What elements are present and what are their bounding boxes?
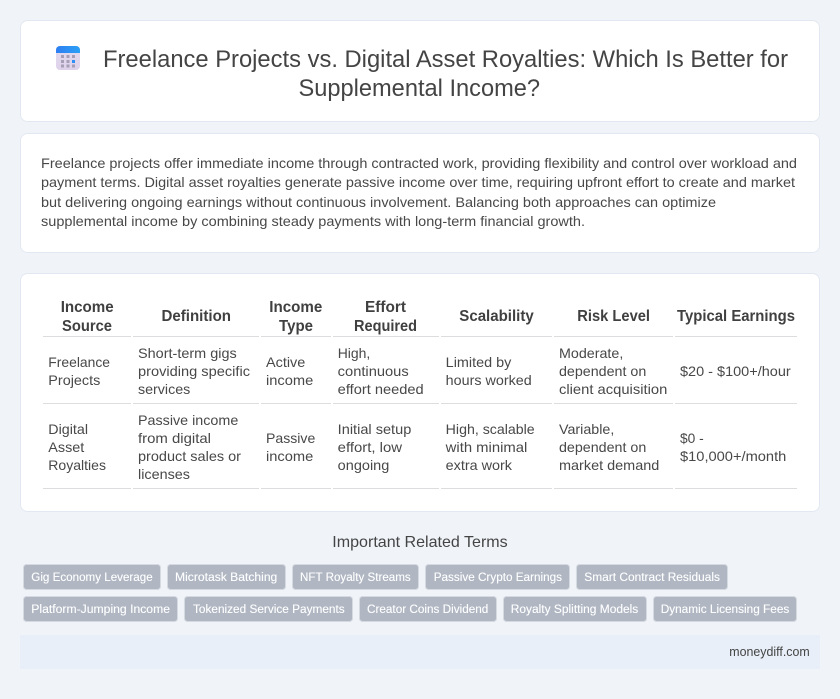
table row: freelance projects: Short-term gigs [138, 345, 237, 361]
title text [103, 46, 788, 102]
table row: digital asset royalties: Initial setup [338, 421, 412, 437]
tags: related terms [24, 564, 796, 622]
heading: important related terms: Important Related Terms [332, 534, 508, 551]
panel: title [20, 20, 820, 122]
tag [184, 596, 352, 622]
table header [61, 299, 795, 335]
tag: Dynamic Licensing Fees [661, 602, 789, 616]
table row: freelance projects: providing specific [138, 363, 250, 379]
tag: NFT Royalty Streams [300, 570, 411, 584]
table row: digital asset royalties: product sales or [138, 448, 241, 464]
table row: freelance projects: client acquisition [559, 381, 667, 397]
table row: freelance projects: Limited by [446, 354, 511, 370]
tag: Smart Contract Residuals [584, 570, 720, 584]
footer bar [20, 635, 820, 669]
table row: digital asset royalties: High, scalable [446, 421, 535, 437]
table row: digital asset royalties: ongoing [338, 457, 389, 473]
table row: freelance projects: effort needed [338, 381, 424, 397]
table header: Scalability [459, 308, 534, 325]
table row: digital asset royalties [48, 412, 786, 482]
table row: freelance projects: Moderate, [559, 345, 623, 361]
table header: Typical Earnings [677, 308, 795, 325]
intro paragraph: but delivering ongoing earnings without continuous involvement. Balancing both approaches can optimize [41, 194, 716, 210]
table header: Income [269, 299, 322, 316]
tag [292, 564, 418, 590]
table row: freelance projects: Projects [48, 372, 100, 388]
tag: Passive Crypto Earnings [434, 570, 562, 584]
table row: digital asset royalties: with minimal [445, 439, 527, 455]
tag [426, 564, 570, 590]
tag: Creator Coins Dividend [367, 602, 488, 616]
tag: Royalty Splitting Models [511, 602, 638, 616]
table row: digital asset royalties: Passive [266, 430, 316, 446]
table row: digital asset royalties: effort, low [338, 439, 403, 455]
table row: digital asset royalties: market demand [559, 457, 659, 473]
table row: freelance projects: $20 - $100+/hour [680, 363, 791, 379]
tag [504, 596, 646, 622]
table row: digital asset royalties: Passive income [138, 412, 239, 428]
tag: Gig Economy Leverage [31, 570, 153, 584]
tag [24, 564, 160, 590]
intro paragraph: Freelance projects offer immediate income through contracted work, providing flexibility and control over workload and [41, 155, 797, 171]
table row: freelance projects: services [138, 381, 190, 397]
table row: digital asset royalties: licenses [138, 466, 190, 482]
table row: digital asset royalties: $10,000+/month [680, 448, 786, 464]
table row: digital asset royalties: dependent on [559, 439, 646, 455]
intro paragraph: payment terms. Digital asset royalties generate passive income over time, requiring upfront effort to create and market [41, 174, 795, 190]
table row: freelance projects: dependent on [559, 363, 646, 379]
table header: Risk Level [577, 308, 650, 325]
intro paragraph: supplemental income by combining steady payments with long-term financial growth. [41, 213, 585, 229]
tag [654, 596, 796, 622]
table row: digital asset royalties: Asset [48, 439, 84, 455]
table row: digital asset royalties: $0 - [680, 430, 704, 446]
icon: calendar [56, 46, 80, 70]
table row: freelance projects: hours worked [446, 372, 532, 388]
tag: Tokenized Service Payments [193, 602, 345, 616]
table header: Definition [162, 308, 231, 325]
table row: freelance projects: High, [338, 345, 370, 361]
table header: Required [354, 318, 417, 335]
table row: digital asset royalties: Digital [48, 421, 88, 437]
table row: freelance projects [48, 345, 791, 397]
tag [360, 596, 496, 622]
table row: digital asset royalties: extra work [446, 457, 513, 473]
tag [576, 564, 728, 590]
table header: Type [279, 318, 313, 335]
panel: introduction [20, 134, 820, 252]
tag: Microtask Batching [175, 570, 277, 584]
table header: Effort [365, 299, 407, 316]
table header: Source [62, 318, 112, 335]
table row: digital asset royalties: Royalties [48, 457, 106, 473]
table row: digital asset royalties: from digital [138, 430, 211, 446]
title text: Supplemental Income? [298, 75, 540, 102]
table row: digital asset royalties: income [266, 448, 314, 464]
table row: freelance projects: income [266, 372, 314, 388]
tag: Platform-Jumping Income [31, 602, 170, 616]
table row: digital asset royalties: Variable, [559, 421, 614, 437]
tag [168, 564, 286, 590]
footer source text: moneydiff.com [729, 645, 810, 659]
table header: Income [61, 299, 114, 316]
intro paragraph [41, 155, 797, 229]
table row: freelance projects: continuous [338, 363, 409, 379]
title text: Freelance Projects vs. Digital Asset Royalties: Which Is Better for [103, 46, 788, 73]
table row: freelance projects: Freelance [48, 354, 110, 370]
table row: freelance projects: Active [266, 354, 306, 370]
panel: comparison table [20, 274, 820, 512]
tag [24, 596, 178, 622]
